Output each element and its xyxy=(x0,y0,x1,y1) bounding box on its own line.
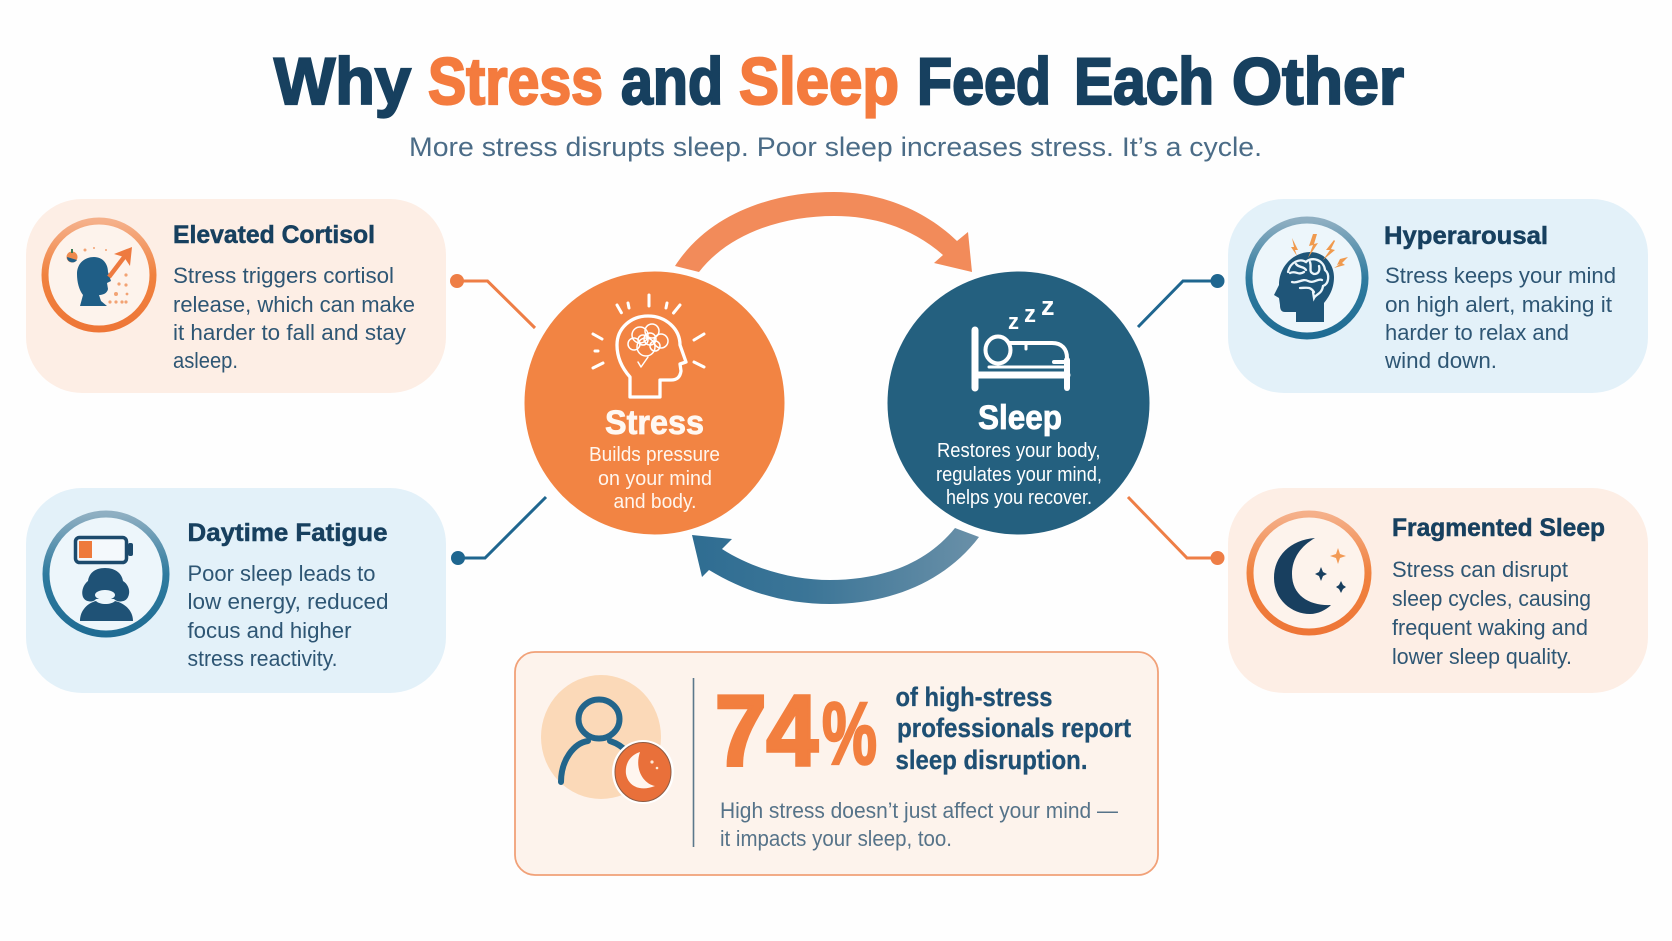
text block: it harder to fall and stay xyxy=(173,320,407,345)
divider xyxy=(692,678,694,847)
panel: statistic callout xyxy=(515,652,1158,875)
text block xyxy=(589,444,720,513)
text block: Stress triggers cortisol xyxy=(173,263,394,288)
text block: focus and higher xyxy=(188,618,352,643)
title: Stress xyxy=(428,44,603,118)
text block: sleep cycles, causing xyxy=(1392,586,1591,611)
icon: low battery person xyxy=(46,514,166,634)
text block: frequent waking and xyxy=(1392,615,1588,640)
text block: wind down. xyxy=(1384,348,1497,373)
text block: Stress can disrupt xyxy=(1392,557,1569,582)
icon: cortisol head xyxy=(45,221,153,329)
text block: and body. xyxy=(614,491,696,513)
icon: moon and stars xyxy=(1250,514,1368,632)
heading: Daytime Fatigue xyxy=(188,519,388,547)
arrow: stress to sleep xyxy=(675,192,972,272)
icon: bed xyxy=(975,330,1067,388)
text block: lower sleep quality. xyxy=(1392,644,1572,669)
connector: cortisol to stress xyxy=(450,274,535,328)
title: Why xyxy=(274,44,411,118)
title: Feed xyxy=(917,44,1051,118)
stat description: of high-stress xyxy=(896,682,1052,712)
text block: Restores your body, xyxy=(937,440,1100,462)
text block xyxy=(188,561,388,671)
stat note xyxy=(720,798,1118,851)
text block: on your mind xyxy=(598,468,712,490)
panel: hyperarousal xyxy=(1228,199,1648,393)
heading: Stress xyxy=(605,404,704,442)
icon: zzz: z xyxy=(1041,291,1054,321)
text block xyxy=(1384,263,1616,373)
icon: tangled head xyxy=(593,295,704,397)
stat description xyxy=(896,682,1131,775)
big number xyxy=(715,675,877,787)
arrow: sleep to stress xyxy=(692,528,979,604)
text block: on high alert, making it xyxy=(1385,292,1613,317)
title: Sleep xyxy=(739,44,899,118)
text block: low energy, reduced xyxy=(188,589,388,614)
connector: fragmented sleep to sleep xyxy=(1128,497,1224,565)
icon: zzz: z xyxy=(1008,309,1019,334)
heading: Hyperarousal xyxy=(1384,222,1548,250)
icon: zzz xyxy=(1008,291,1054,334)
panel: stress circle xyxy=(524,272,784,534)
icon: zzz: z xyxy=(1024,301,1036,328)
title: Other xyxy=(1232,44,1404,118)
heading: Fragmented Sleep xyxy=(1392,514,1605,542)
heading: Elevated Cortisol xyxy=(173,221,375,249)
stat note: High stress doesn’t just affect your mind — xyxy=(720,798,1118,823)
text block xyxy=(173,263,415,373)
panel: daytime fatigue xyxy=(26,488,446,693)
panel: fragmented sleep xyxy=(1228,488,1648,693)
icon: brain head with bolts xyxy=(1249,220,1365,336)
connector: fatigue to stress xyxy=(451,497,546,565)
heading: Sleep xyxy=(978,399,1062,437)
text block: release, which can make xyxy=(173,292,415,317)
stat description: professionals report xyxy=(897,713,1131,743)
big number: 74 xyxy=(715,675,818,787)
text block: Poor sleep leads to xyxy=(188,561,376,586)
big number: % xyxy=(822,684,877,783)
connector: hyperarousal to sleep xyxy=(1138,274,1224,327)
title: and xyxy=(621,44,723,118)
text block: asleep. xyxy=(173,348,238,373)
title: Each xyxy=(1074,44,1214,118)
text block: Stress keeps your mind xyxy=(1385,263,1616,288)
panel: sleep circle xyxy=(888,272,1150,534)
text block: helps you recover. xyxy=(946,487,1092,509)
icon: person with moon badge xyxy=(541,675,674,804)
panel: elevated cortisol xyxy=(26,199,446,393)
stat note: it impacts your sleep, too. xyxy=(720,826,952,851)
subtitle: More stress disrupts sleep. Poor sleep increases stress. It’s a cycle. xyxy=(409,132,1262,162)
title xyxy=(274,44,1404,118)
text block: regulates your mind, xyxy=(936,464,1102,486)
text block: stress reactivity. xyxy=(188,646,338,671)
text block: harder to relax and xyxy=(1385,320,1569,345)
text block xyxy=(936,440,1102,509)
text block xyxy=(1392,557,1591,669)
stat description: sleep disruption. xyxy=(896,745,1088,775)
text block: Builds pressure xyxy=(589,444,720,466)
